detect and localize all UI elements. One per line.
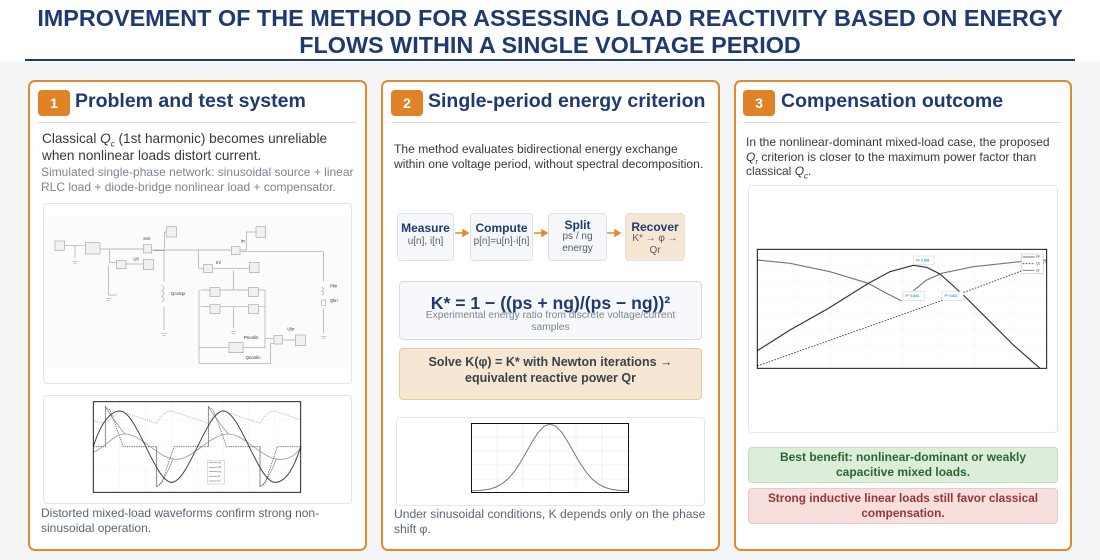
circuit diagram: Ism <box>143 236 151 241</box>
flow step: compute: p[n]=u[n]·i[n] <box>474 236 529 247</box>
flow step: recover <box>625 213 685 261</box>
title <box>37 5 1063 58</box>
text: outcome <box>746 135 1050 180</box>
data tip: PF 0.844: PF 0.844 <box>905 294 919 298</box>
heading: single-period energy criterion: Single-period energy criterion <box>428 90 705 112</box>
formula box <box>399 281 702 340</box>
flow step: recover: Qr <box>649 245 661 256</box>
circuit diagram <box>54 226 338 364</box>
caption: K dependence: Under sinusoidal conditions, K depends only on the phase <box>394 507 705 521</box>
caption: waveforms <box>41 506 319 535</box>
heading: problem and test system: Problem and test system <box>75 90 306 112</box>
waveform legend: Ism <box>218 471 221 473</box>
text: simulated network: RLC load + diode-bridge nonlinear load + compensator. <box>41 180 336 194</box>
caption: waveforms: sinusoidal operation. <box>41 521 151 535</box>
waveform legend: Ub <box>218 462 221 464</box>
panel: problem and test system <box>28 80 367 551</box>
card: K curve <box>396 417 705 506</box>
badge 1: 1 <box>50 95 58 111</box>
badge 2 <box>391 90 423 116</box>
callout: Newton solve: Solve K(φ) = K* with Newton iterations → <box>428 355 673 369</box>
callout: limitation: Strong inductive linear loads still favor classical <box>768 491 1038 505</box>
card: circuit diagram <box>43 203 352 384</box>
formula: K* = 1 − ((ps + ng)/(ps − ng))² <box>431 293 670 313</box>
title underline <box>25 59 1075 60</box>
flow step: recover: K* → φ → <box>632 233 678 244</box>
data tip: PF 0.881 <box>914 256 934 264</box>
badge 3: 3 <box>755 95 763 111</box>
flow step: split: Split <box>564 218 590 232</box>
data tip: PF 0.821: PF 0.821 <box>944 294 958 298</box>
callout: best benefit <box>748 447 1058 483</box>
panel: compensation outcome <box>734 80 1072 551</box>
text: outcome: In the nonlinear-dominant mixed-load case, the proposed <box>746 135 1050 149</box>
flow step: split <box>548 213 607 261</box>
text: simulated network <box>41 165 354 194</box>
text: method description <box>394 142 703 171</box>
badge 2: 2 <box>403 95 411 111</box>
text: simulated network: Simulated single-phase network: sinusoidal source + linear <box>41 165 354 179</box>
circuit diagram: U0 <box>133 257 139 262</box>
circuit diagram: Irc <box>241 238 246 243</box>
flow step: split: ps / ng <box>562 231 593 242</box>
caption: waveforms: Distorted mixed-load waveforms confirm strong non- <box>41 506 319 520</box>
data tip: PF 0.844 <box>903 292 924 300</box>
card: waveforms <box>43 395 352 504</box>
flow step: split: energy <box>562 243 593 254</box>
arrow <box>534 229 548 237</box>
badge 3 <box>743 90 775 116</box>
formula note <box>426 310 676 333</box>
waveform legend: Inl <box>218 476 221 478</box>
callout: Newton solve <box>399 348 702 400</box>
text: classical Qc <box>42 131 327 163</box>
flow step: compute <box>470 213 533 261</box>
caption: K dependence <box>394 507 705 536</box>
flow step: measure: u[n], i[n] <box>408 236 443 247</box>
header band <box>0 0 1100 62</box>
callout: best benefit: capacitive mixed loads. <box>836 465 970 479</box>
waveform legend <box>207 461 224 484</box>
callout: Newton solve: equivalent reactive power Qr <box>465 371 636 385</box>
data tip: PF 0.821 <box>942 292 963 300</box>
formula note: Experimental energy ratio from discrete voltage/current <box>426 310 675 321</box>
chart legend: Qc <box>1036 262 1041 266</box>
circuit diagram: Pnonlin <box>244 335 259 340</box>
arrow <box>607 229 621 237</box>
chart legend: Qr <box>1036 268 1041 272</box>
flow step: compute: Compute <box>476 221 528 235</box>
flow step: recover: Recover <box>631 220 679 234</box>
K(phi) bell curve <box>471 423 629 493</box>
arrow <box>455 229 469 237</box>
circuit diagram: Inl <box>216 260 221 265</box>
panel: single-period energy criterion <box>381 80 720 551</box>
badge 1 <box>38 90 70 116</box>
text: method description: within one voltage period, without spectral decomposition. <box>394 157 703 171</box>
waveform legend: Ubr <box>218 466 222 469</box>
chart legend: PF <box>1036 255 1040 259</box>
text: outcome: classical Qc. <box>746 164 811 180</box>
title: FLOWS WITHIN A SINGLE VOLTAGE PERIOD <box>299 32 801 58</box>
flow step: measure <box>397 213 454 261</box>
text: method description: The method evaluates bidirectional energy exchange <box>394 142 678 156</box>
callout: limitation <box>748 488 1058 524</box>
text: classical Qc: Classical Qc (1st harmonic) becomes unreliable <box>42 131 327 149</box>
waveform legend: Irc <box>218 480 221 483</box>
chart legend <box>1021 254 1043 273</box>
circuit diagram: Qnonlin <box>246 355 261 360</box>
power factor chart <box>756 248 1048 369</box>
card: power factor chart <box>748 185 1058 433</box>
callout: best benefit: Best benefit: nonlinear-dominant or weakly <box>780 450 1026 464</box>
circuit diagram: Qlin <box>330 298 338 303</box>
formula note: samples <box>531 322 570 333</box>
callout: limitation: compensation. <box>861 506 945 520</box>
waveform chart <box>92 401 302 493</box>
circuit diagram: Ubr <box>287 327 295 332</box>
flow step: measure: Measure <box>401 221 450 235</box>
title: IMPROVEMENT OF THE METHOD FOR ASSESSING LOAD REACTIVITY BASED ON ENERGY <box>37 5 1063 31</box>
data tip: PF 0.881: PF 0.881 <box>916 258 930 262</box>
text: outcome: Qr criterion is closer to the maximum power factor than <box>746 150 1036 166</box>
heading: compensation outcome: Compensation outcome <box>781 90 1003 112</box>
circuit diagram: Qcomp <box>171 291 186 296</box>
circuit diagram: Plin <box>330 283 338 288</box>
caption: K dependence: shift φ. <box>394 522 431 536</box>
text: classical Qc: when nonlinear loads distort current. <box>42 148 261 163</box>
